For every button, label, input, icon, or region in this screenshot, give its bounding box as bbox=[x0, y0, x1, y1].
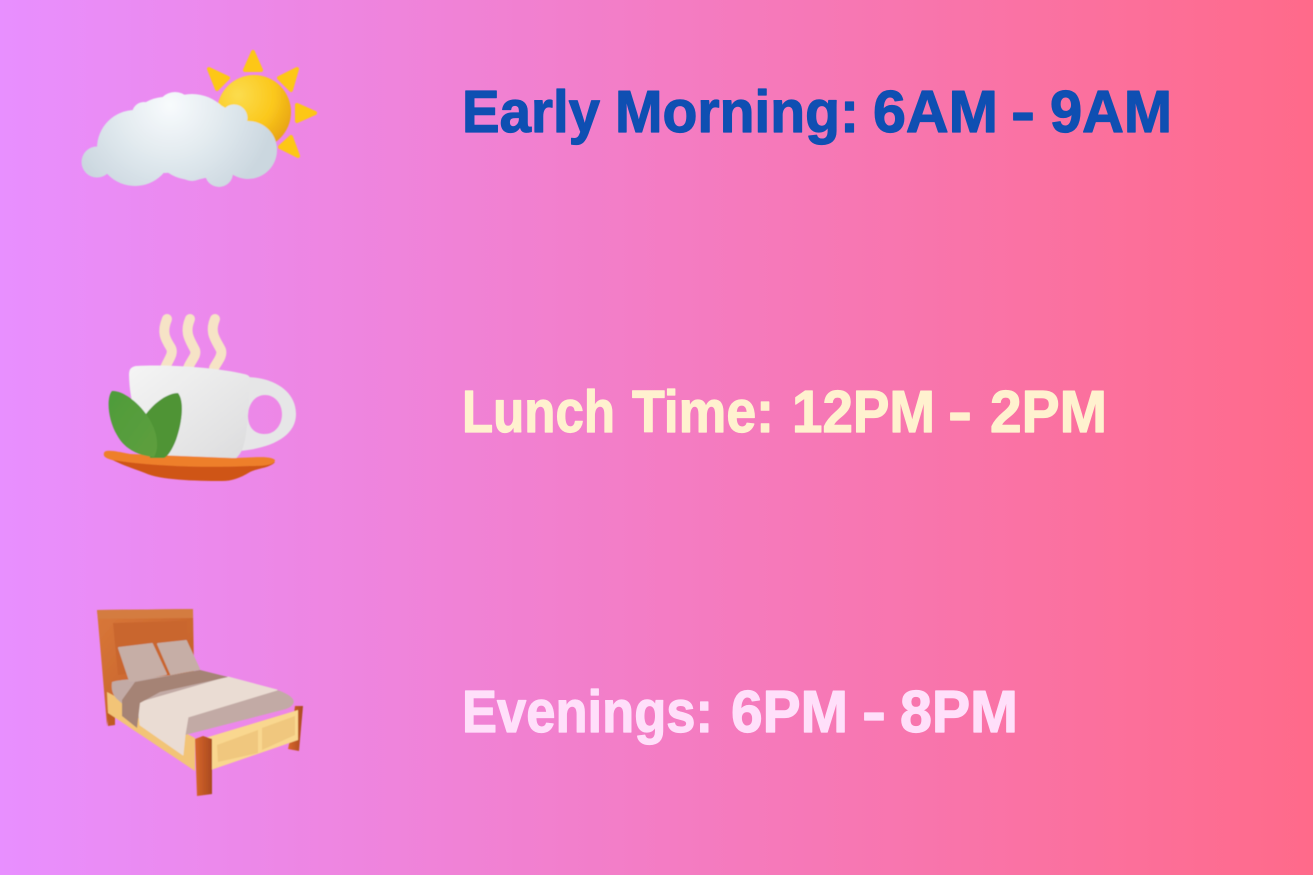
heading: lunch time bbox=[462, 379, 1107, 445]
sheet bbox=[138, 677, 277, 755]
heading: lunch time: 2PM bbox=[990, 379, 1107, 445]
cloud bbox=[82, 92, 277, 187]
heading: early morning: 6AM bbox=[873, 79, 998, 145]
heading: early morning: Early bbox=[462, 79, 600, 145]
heading: lunch time: Lunch bbox=[462, 379, 615, 445]
brown blanket band bbox=[122, 670, 228, 728]
mattress bbox=[112, 670, 294, 735]
icon: bed bbox=[97, 609, 303, 796]
heading: early morning bbox=[462, 79, 1172, 145]
heading: early morning: Morning: bbox=[615, 79, 859, 145]
leaves bbox=[146, 393, 182, 458]
cup body bbox=[129, 365, 250, 459]
front bed post bbox=[195, 736, 212, 796]
heading: lunch time: - bbox=[948, 379, 972, 445]
sun disc bbox=[217, 75, 291, 149]
heading: evenings: Evenings: bbox=[462, 679, 713, 745]
heading: evenings: 6PM bbox=[731, 679, 848, 745]
far bed leg bbox=[107, 710, 115, 726]
bed rail bbox=[107, 692, 195, 771]
heading: evenings: 8PM bbox=[900, 679, 1018, 745]
footboard bbox=[205, 710, 298, 772]
heading: evenings: - bbox=[862, 679, 886, 745]
heading: early morning: 9AM bbox=[1050, 79, 1172, 145]
handle bbox=[240, 377, 296, 451]
saucer bbox=[104, 455, 275, 481]
icon: sun behind cloud bbox=[82, 52, 315, 187]
icon: tea cup bbox=[104, 319, 296, 481]
heading: lunch time: Time: bbox=[632, 379, 774, 445]
headboard bbox=[97, 609, 194, 726]
heading: lunch time: 12PM bbox=[792, 379, 935, 445]
steam bbox=[164, 319, 221, 368]
pillows bbox=[119, 644, 166, 681]
sun rays bbox=[209, 52, 315, 156]
heading: evenings bbox=[462, 679, 1018, 745]
heading: early morning: - bbox=[1011, 79, 1035, 145]
right bed post bbox=[288, 706, 303, 751]
